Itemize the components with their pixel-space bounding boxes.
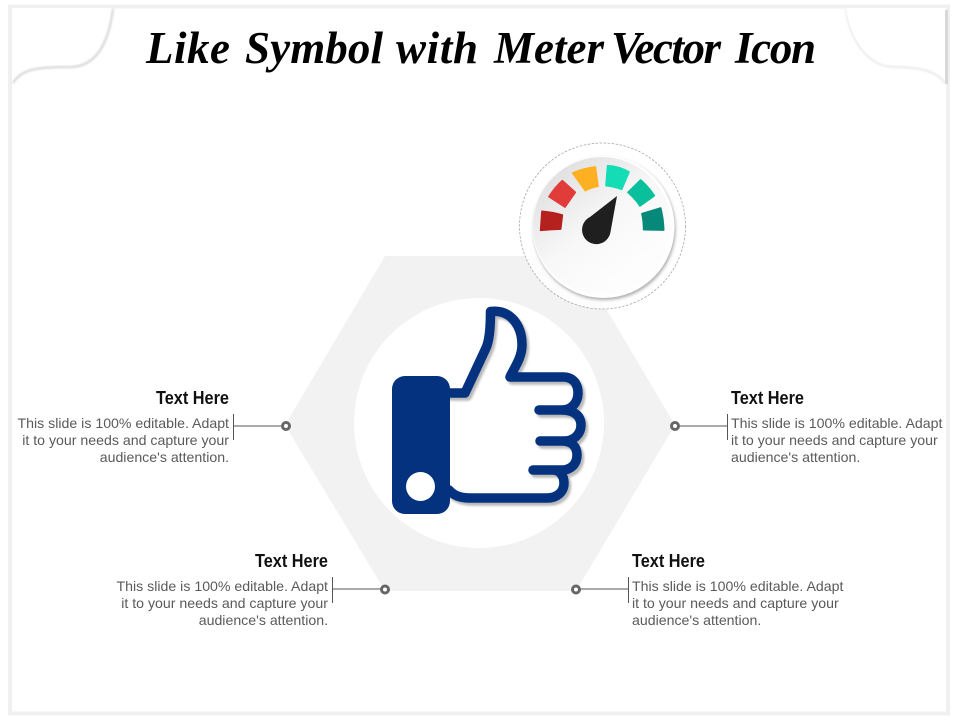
callout: left upper: audience's attention. bbox=[100, 449, 229, 465]
callout: right lower: This slide is 100% editable. Adapt bbox=[632, 578, 844, 594]
hexagon backdrop bbox=[285, 256, 675, 591]
title bbox=[145, 23, 816, 73]
meter dial face bbox=[533, 157, 671, 295]
callout: right upper: This slide is 100% editable. Adapt bbox=[731, 415, 943, 431]
title: with bbox=[396, 23, 478, 73]
callout: right upper bbox=[672, 387, 943, 465]
callout: left upper: This slide is 100% editable. Adapt bbox=[18, 415, 229, 431]
callout: left lower bbox=[117, 550, 388, 628]
icon: thumbs up bbox=[392, 311, 584, 514]
title: Like bbox=[145, 23, 230, 73]
meter dial bbox=[532, 156, 674, 298]
title: Meter bbox=[493, 23, 604, 73]
callout: left lower: This slide is 100% editable. Adapt bbox=[117, 578, 328, 594]
meter segments bbox=[541, 166, 664, 230]
callout: left lower: Text Here bbox=[255, 550, 328, 571]
callout: right upper: audience's attention. bbox=[731, 449, 860, 465]
icon: meter gauge bbox=[520, 143, 686, 309]
title: Vector bbox=[611, 23, 721, 73]
callout: right lower: it to your needs and capture your bbox=[632, 595, 839, 611]
callout: right lower: audience's attention. bbox=[632, 612, 761, 628]
callout: left upper bbox=[18, 387, 290, 465]
callout: left lower: audience's attention. bbox=[199, 612, 328, 628]
corner curl: top left bbox=[12, 8, 113, 83]
callout: right lower: Text Here bbox=[632, 550, 705, 571]
callout: left upper: Text Here bbox=[156, 387, 229, 408]
title: Icon bbox=[734, 23, 816, 73]
callout: left upper: it to your needs and capture your bbox=[22, 432, 229, 448]
inner white circle bbox=[354, 298, 604, 548]
callout: right upper: it to your needs and capture your bbox=[731, 432, 938, 448]
meter dashed ring bbox=[520, 143, 686, 309]
title: Symbol bbox=[245, 23, 383, 73]
callout: right lower bbox=[572, 550, 844, 628]
callout: left lower: it to your needs and capture your bbox=[121, 595, 328, 611]
meter needle bbox=[582, 196, 617, 244]
callout: right upper: Text Here bbox=[731, 387, 804, 408]
meter dial shadow bbox=[534, 158, 676, 300]
corner curl: top right bbox=[846, 8, 948, 84]
